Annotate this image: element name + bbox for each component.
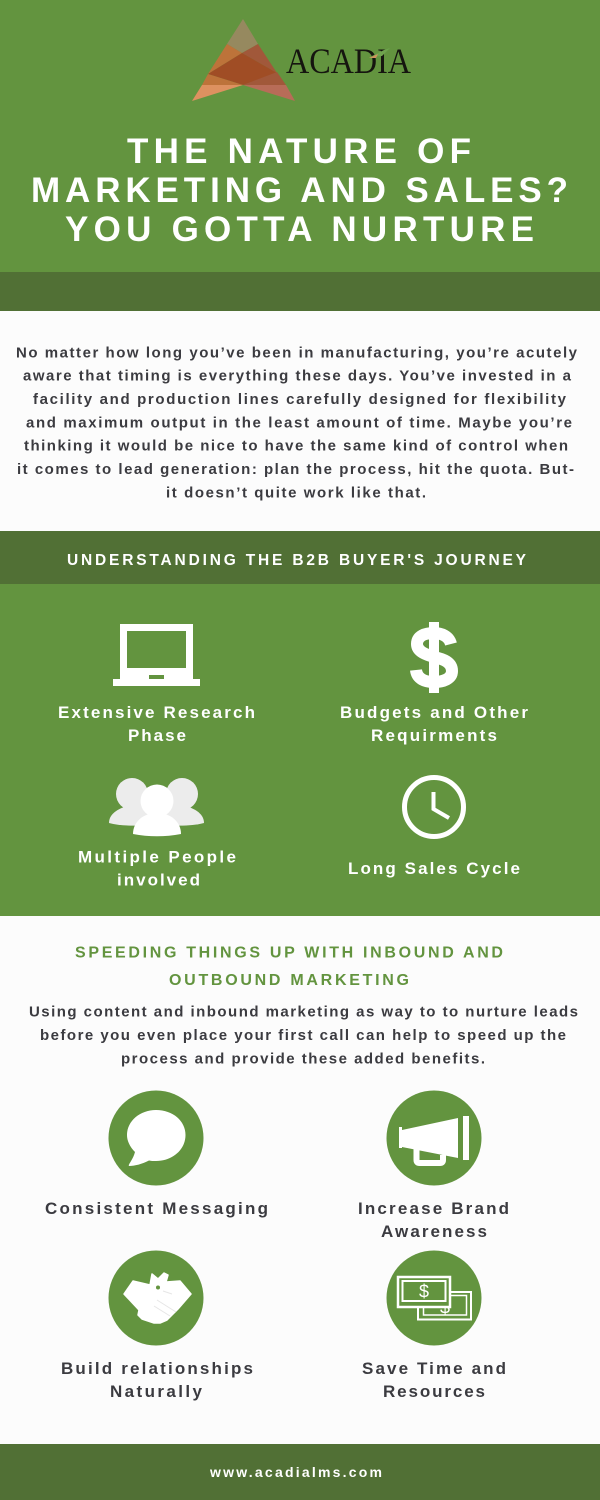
label: increase brand awareness: [358, 1199, 509, 1241]
text block: inbound marketing: process and provide these added benefits.: [121, 1050, 485, 1067]
icon: clock: [404, 778, 464, 836]
icon: megaphone: [386, 1090, 482, 1186]
label: increase brand awareness: Awareness: [381, 1222, 487, 1241]
label: budgets and other requirements: Budgets and Other: [340, 703, 528, 722]
title: YOU GOTTA NURTURE: [65, 210, 534, 249]
intro text block: aware that timing is everything these days. You’ve invested in a: [23, 368, 572, 385]
text block: inbound marketing: [29, 1004, 578, 1067]
intro text block: thinking it would be nice to have the same kind of control when: [24, 438, 568, 455]
heading: speeding things up: [75, 944, 503, 989]
text block: inbound marketing: Using content and inbound marketing as way to to nurture leads: [29, 1004, 578, 1021]
intro text block: facility and production lines carefully designed for flexibility: [33, 391, 567, 408]
logo: Acadia: [192, 19, 411, 101]
text block: inbound marketing: before you even place your first call can help to speed up the: [40, 1027, 566, 1044]
icon: dollar sign: [416, 622, 452, 693]
icon: money: [386, 1250, 482, 1346]
label: build relationships naturally: [61, 1359, 253, 1401]
logo: Acadia: ACADIA: [286, 41, 411, 81]
header panel: [0, 0, 600, 311]
label: increase brand awareness: Increase Brand: [358, 1199, 509, 1218]
intro text block: [16, 344, 578, 501]
icon: handshake: [108, 1250, 204, 1346]
label: extensive research phase: [58, 703, 255, 745]
panel: buyer's journey: [0, 531, 600, 916]
icon: people: [109, 778, 204, 836]
label: build relationships naturally: Naturally: [110, 1382, 203, 1401]
section heading: understanding the B2B buyer's journey: UNDERSTANDING THE B2B BUYER'S JOURNEY: [67, 552, 527, 569]
label: extensive research phase: Extensive Research: [58, 703, 255, 722]
title: MARKETING AND SALES?: [31, 171, 568, 210]
label: multiple people involved: involved: [117, 870, 200, 890]
label: consistent messaging: Consistent Messaging: [45, 1199, 268, 1218]
footer: [0, 1444, 600, 1500]
label: extensive research phase: Phase: [128, 726, 186, 745]
label: budgets and other requirements: [340, 703, 528, 745]
label: budgets and other requirements: Requirments: [371, 726, 497, 745]
intro text block: and maximum output in the least amount of time. Maybe you’re: [26, 414, 572, 431]
label: save time and resources: Save Time and: [362, 1359, 506, 1378]
intro text block: it comes to lead generation: plan the process, hit the quota. But-: [17, 461, 574, 478]
intro text block: No matter how long you’ve been in manufacturing, you’re acutely: [16, 344, 578, 361]
label: multiple people involved: Multiple People: [78, 848, 236, 866]
journey background: [0, 584, 600, 916]
section heading: understanding the B2B buyer's journey: [0, 531, 600, 584]
heading: speeding things up: OUTBOUND MARKETING: [169, 972, 409, 989]
icon: money: $: [440, 1298, 450, 1318]
title: [31, 132, 568, 249]
heading: speeding things up: SPEEDING THINGS UP WITH INBOUND AND: [75, 944, 503, 962]
label: save time and resources: Resources: [383, 1382, 485, 1401]
label: build relationships naturally: Build relationships: [61, 1359, 253, 1378]
label: multiple people involved: [78, 848, 236, 890]
label: long sales cycle: Long Sales Cycle: [348, 859, 520, 878]
icon: money: $: [419, 1282, 429, 1302]
icon: laptop: [113, 624, 200, 686]
footer: www.acadialms.com: [209, 1464, 382, 1480]
label: save time and resources: [362, 1359, 506, 1401]
intro text block: it doesn’t quite work like that.: [166, 484, 426, 501]
title: THE NATURE OF: [127, 132, 471, 171]
icon: speech bubble: [108, 1090, 204, 1186]
